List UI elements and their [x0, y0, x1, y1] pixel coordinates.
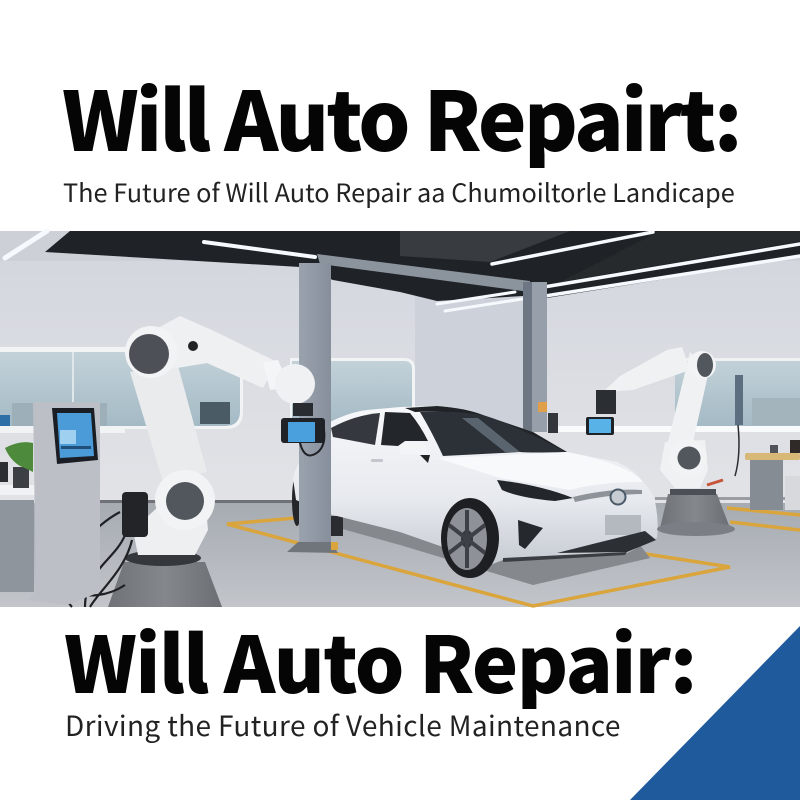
left wall windows	[0, 347, 415, 433]
right robot arm	[586, 347, 739, 536]
workshop background	[0, 231, 800, 607]
left bench with plant	[0, 442, 36, 592]
subtitle: bottom: Driving the Future of Vehicle Maintenance	[65, 705, 621, 745]
ceiling lights	[5, 231, 800, 311]
title: bottom heading: Will Auto Repair:	[64, 604, 696, 716]
car	[292, 406, 658, 578]
subtitle: top: The Future of Will Auto Repair aa Chumoiltorle Landicape	[63, 174, 735, 210]
car shadow	[310, 510, 650, 585]
right work desk	[745, 440, 800, 510]
front lift post	[287, 263, 338, 553]
right wall window	[555, 358, 800, 432]
diagnostic kiosk	[28, 402, 100, 605]
left robot arm	[60, 316, 325, 607]
ceiling	[0, 231, 800, 301]
rear lift post	[317, 254, 558, 433]
yellow floor markings	[227, 508, 800, 606]
title: top heading: Will Auto Repairt:	[62, 56, 740, 175]
